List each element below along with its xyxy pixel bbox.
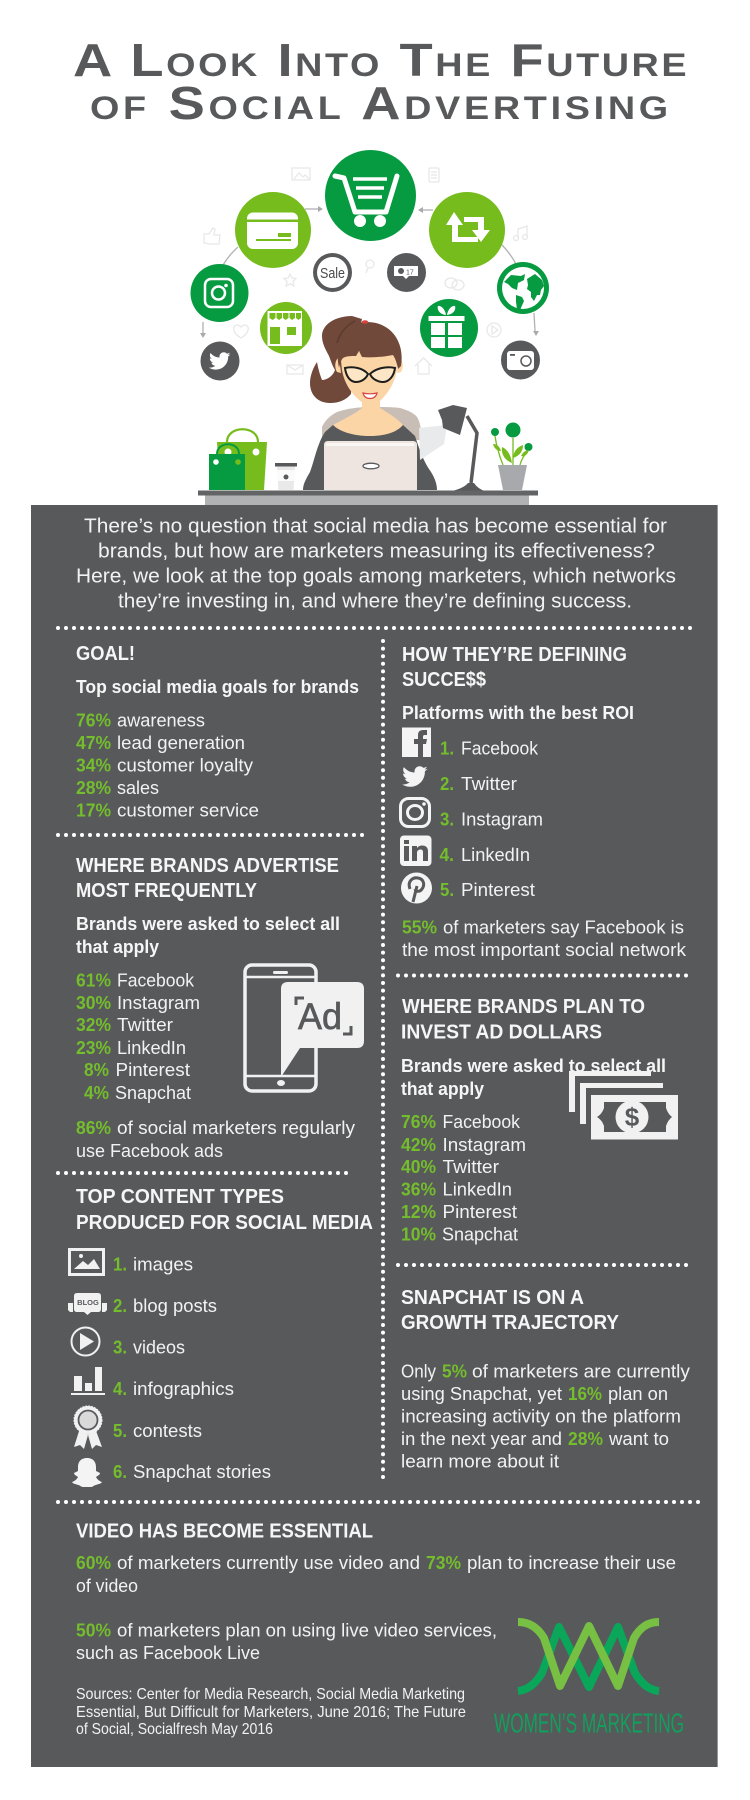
panel: top content types: [68, 1186, 373, 1487]
goals list: awareness: [117, 710, 205, 730]
intro text: [76, 516, 676, 612]
advertising list: [76, 970, 200, 1103]
facebook ads stat: [76, 1117, 356, 1161]
icon: notification bubble: [387, 253, 426, 292]
investment list: Snapchat: [442, 1224, 518, 1244]
panel: goal: GOAL!: [76, 643, 135, 665]
chair/scarf: [322, 407, 421, 440]
content type: blog posts: blog posts: [133, 1295, 217, 1316]
facebook importance stat: [402, 916, 687, 960]
panel: where brands plan to invest: that apply: [401, 1079, 484, 1099]
advertising list: Snapchat: [115, 1082, 191, 1103]
platform: facebook: Facebook: [461, 738, 539, 758]
platform: instagram: Instagram: [461, 808, 543, 830]
panel: how they're defining success: [400, 644, 687, 960]
platform: linkedin: 4.: [440, 844, 454, 865]
investment list: 10%: [401, 1224, 436, 1244]
goals list: customer service: [117, 800, 259, 820]
panel: how they're defining success: HOW THEY’RE DEFINING: [402, 644, 627, 666]
snapchat paragraph: 16%: [568, 1383, 602, 1404]
live video stat: 50%: [76, 1620, 111, 1640]
intro text: they’re investing in, and where they’re defining success.: [118, 590, 632, 612]
neck and chest: [333, 398, 403, 436]
platform: twitter: Twitter: [461, 773, 517, 794]
video usage stat: plan to increase their use: [467, 1552, 676, 1573]
panel: where brands advertise: [76, 855, 364, 1161]
panel: dark content background: [31, 505, 718, 1767]
snapchat paragraph: 5%: [442, 1360, 467, 1382]
panel: where brands advertise: that apply: [76, 937, 159, 957]
content type: snapchat stories: 6.: [113, 1461, 127, 1482]
investment list: 40%: [401, 1156, 436, 1177]
panel: snapchat growth: GROWTH TRAJECTORY: [401, 1312, 620, 1334]
advertising list: 4%: [84, 1082, 109, 1103]
live video stat: such as Facebook Live: [76, 1642, 260, 1663]
platform: twitter: [402, 766, 517, 794]
title: of Social Advertising: [90, 77, 668, 129]
facebook ads stat: of social marketers regularly: [117, 1117, 356, 1138]
panel: where brands advertise: WHERE BRANDS ADVERTISE: [76, 855, 339, 877]
glasses: [345, 367, 395, 382]
icon: phone with Ad bubble: [245, 965, 364, 1091]
content type: videos: videos: [133, 1336, 185, 1358]
content type: infographics: infographics: [133, 1378, 234, 1399]
panel: top content types: PRODUCED FOR SOCIAL MEDIA: [76, 1212, 373, 1234]
advertising list: 32%: [76, 1014, 111, 1035]
content type: blog posts: 2.: [113, 1295, 127, 1316]
facebook ads stat: use Facebook ads: [76, 1140, 223, 1161]
sources: Sources: Center for Media Research, Social Media Marketing: [76, 1686, 465, 1703]
icon: instagram: [190, 264, 248, 322]
title: A Look Into The Future: [73, 34, 687, 86]
panel: top content types: TOP CONTENT TYPES: [76, 1186, 284, 1208]
video usage stat: 60%: [76, 1552, 111, 1573]
intro text: brands, but how are marketers measuring its effectiveness?: [98, 540, 655, 562]
icon: banknotes: [569, 1071, 678, 1140]
advertising list: Facebook: [117, 970, 195, 990]
advertising list: 30%: [76, 992, 111, 1013]
face: [340, 352, 398, 404]
content type: blog posts: [68, 1293, 217, 1316]
advertising list: 8%: [84, 1059, 109, 1080]
lamp: [438, 405, 485, 491]
ears: [335, 357, 403, 373]
advertising list: 61%: [76, 970, 111, 990]
video usage stat: [76, 1552, 676, 1596]
logo: Women's Marketing: [494, 1622, 684, 1739]
icon: gift: [420, 299, 478, 357]
platform: facebook: 1.: [440, 738, 454, 758]
investment list: 42%: [401, 1134, 436, 1155]
icon: globe: [497, 262, 549, 314]
facebook importance stat: 55%: [402, 916, 437, 938]
content type: snapchat stories: Snapchat stories: [133, 1461, 271, 1482]
sources: Essential, But Difficult for Marketers, June 2016; The Future: [76, 1704, 466, 1721]
goals list: sales: [117, 777, 159, 798]
content type: images: 1.: [113, 1254, 127, 1274]
light cone: [419, 425, 447, 460]
platform: instagram: [400, 798, 543, 830]
mouth: [363, 393, 377, 398]
desk: [198, 490, 538, 506]
panel: where brands plan to invest: INVEST AD DOLLARS: [401, 1022, 602, 1044]
ponytail: [310, 316, 362, 403]
icon: notification bubble: 17: [406, 270, 414, 276]
investment list: Instagram: [442, 1134, 526, 1155]
icon: credit card: [235, 192, 311, 268]
goals list: customer loyalty: [117, 754, 254, 776]
content type: contests: contests: [133, 1420, 202, 1441]
snapchat paragraph: in the next year and: [401, 1428, 562, 1449]
panel: video: VIDEO HAS BECOME ESSENTIAL: [76, 1520, 373, 1542]
snapchat paragraph: want to: [608, 1428, 669, 1449]
content type: videos: [72, 1328, 185, 1358]
platform: linkedin: LinkedIn: [461, 844, 530, 865]
panel: where brands plan to invest: Brands were asked to select all: [401, 1056, 666, 1076]
icon: camera: [501, 340, 540, 380]
snapchat paragraph: Only: [401, 1360, 437, 1382]
torso: [303, 425, 437, 490]
panel: snapchat growth: [401, 1287, 691, 1472]
goals list: 76%: [76, 710, 111, 730]
investment list: [401, 1111, 526, 1244]
laptop: [324, 441, 417, 490]
goals list: 28%: [76, 777, 111, 798]
video usage stat: of video: [76, 1575, 138, 1596]
content type: infographics: [71, 1367, 234, 1399]
panel: where brands advertise: Brands were asked to select all: [76, 914, 340, 934]
video usage stat: of marketers currently use video and: [117, 1552, 420, 1573]
content type: images: [70, 1250, 193, 1274]
live video stat: of marketers plan on using live video services,: [117, 1620, 497, 1640]
platform: twitter: 2.: [440, 773, 454, 794]
advertising list: LinkedIn: [117, 1037, 186, 1058]
snapchat paragraph: plan on: [608, 1383, 668, 1404]
icon: storefront: [260, 302, 312, 354]
content type: contests: [74, 1406, 202, 1449]
goals list: 47%: [76, 732, 111, 753]
woman character: [303, 316, 447, 490]
investment list: 76%: [401, 1111, 436, 1132]
snapchat paragraph: learn more about it: [401, 1450, 559, 1472]
platform: pinterest: Pinterest: [461, 879, 535, 900]
facebook importance stat: of marketers say Facebook is: [443, 916, 684, 938]
content type: blog posts: BLOG: [77, 1298, 99, 1307]
coffee cup: [275, 463, 297, 490]
live video stat: [76, 1620, 497, 1663]
video usage stat: 73%: [426, 1552, 461, 1573]
content type: images: images: [133, 1254, 193, 1274]
intro text: Here, we look at the top goals among marketers, which networks: [76, 566, 676, 588]
faint background icons: [204, 168, 528, 374]
snapchat paragraph: of marketers are currently: [472, 1360, 691, 1382]
snapchat paragraph: 28%: [568, 1428, 603, 1449]
goals list: 34%: [76, 754, 111, 776]
icon: banknotes: $: [625, 1102, 640, 1132]
content type: videos: 3.: [113, 1336, 127, 1358]
investment list: 36%: [401, 1178, 436, 1200]
panel: goal: [76, 643, 359, 820]
panel: how they're defining success: SUCCE$$: [402, 669, 486, 691]
snapchat paragraph: using Snapchat, yet: [401, 1383, 562, 1404]
icon: twitter badge: [200, 342, 240, 380]
platform: facebook: [402, 728, 539, 758]
icon: retweet: [429, 192, 505, 268]
facebook importance stat: the most important social network: [402, 939, 687, 960]
advertising list: 23%: [76, 1037, 111, 1058]
icon: sale tag: [313, 253, 352, 292]
facebook ads stat: 86%: [76, 1117, 111, 1138]
investment list: Pinterest: [442, 1201, 517, 1222]
sources: of Social, Socialfresh May 2016: [76, 1721, 273, 1738]
advertising list: Pinterest: [116, 1059, 190, 1080]
panel: goal: Top social media goals for brands: [76, 677, 359, 697]
panel: where brands plan to invest: [401, 996, 678, 1244]
investment list: Twitter: [442, 1156, 499, 1177]
icon: shopping cart: [325, 150, 416, 241]
content type: infographics: 4.: [113, 1378, 127, 1399]
potted plant: [491, 422, 532, 490]
platform: linkedin: [400, 836, 530, 866]
goals list: [76, 710, 259, 820]
illustration: woman with social commerce icons: [190, 150, 549, 506]
goals list: 17%: [76, 800, 111, 820]
advertising list: Instagram: [117, 992, 200, 1013]
arrows between icons: [200, 206, 539, 338]
panel: snapchat growth: SNAPCHAT IS ON A: [401, 1287, 584, 1309]
platform: instagram: 3.: [440, 808, 454, 830]
icon: phone with Ad bubble: Ad: [298, 996, 342, 1037]
intro text: There’s no question that social media has become essential for: [84, 516, 667, 538]
investment list: 12%: [401, 1201, 436, 1222]
platform: pinterest: 5.: [440, 879, 454, 900]
investment list: LinkedIn: [442, 1178, 512, 1200]
content type: snapchat stories: [72, 1458, 271, 1487]
content type: contests: 5.: [113, 1420, 127, 1441]
panel: where brands advertise: MOST FREQUENTLY: [76, 880, 258, 902]
goals list: lead generation: [117, 732, 245, 753]
snapchat paragraph: [401, 1360, 691, 1472]
panel: where brands plan to invest: WHERE BRANDS PLAN TO: [402, 996, 645, 1018]
sources: [76, 1686, 466, 1738]
shopping bags: [209, 429, 267, 490]
snapchat paragraph: increasing activity on the platform: [401, 1406, 681, 1426]
title: [73, 34, 687, 129]
icon: sale tag: Sale: [320, 265, 345, 282]
panel: how they're defining success: Platforms with the best ROI: [402, 703, 634, 723]
panel: video: [76, 1520, 676, 1663]
platform: pinterest: [401, 872, 535, 904]
hair top: [338, 322, 402, 369]
investment list: Facebook: [442, 1111, 521, 1132]
advertising list: Twitter: [117, 1014, 173, 1035]
